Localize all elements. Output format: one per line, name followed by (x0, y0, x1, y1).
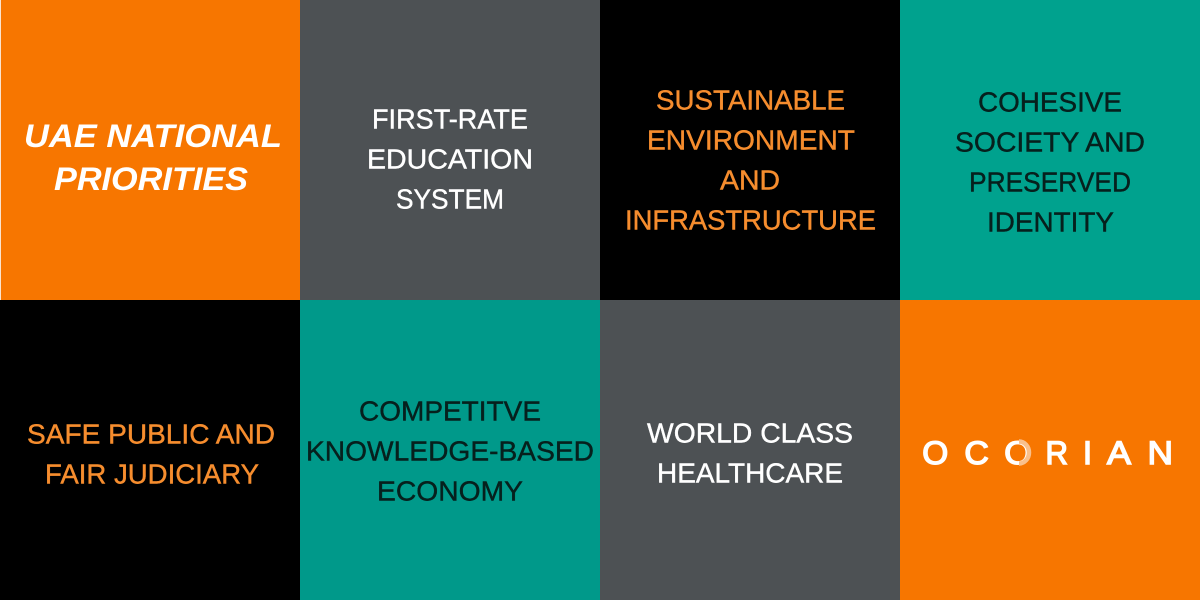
logo: Ocorian wordmark: A (1107, 435, 1132, 471)
panel text: WORLD CLASS (647, 417, 853, 448)
panel: logo (900, 300, 1200, 600)
panel text: HEALTHCARE (657, 457, 843, 488)
panel text: COHESIVE (978, 86, 1122, 117)
panel text: EDUCATION (367, 143, 533, 174)
panel text: INFRASTRUCTURE (625, 204, 876, 235)
panel text: SYSTEM (396, 183, 504, 214)
panel: safe public and fair judiciary (0, 300, 300, 600)
panel: title (1, 0, 300, 300)
panel: cohesive society and preserved identity (900, 0, 1200, 300)
logo: Ocorian wordmark: N (1148, 435, 1173, 471)
panel text: PRESERVED (969, 166, 1131, 197)
panel text: ECONOMY (377, 475, 523, 506)
panel text (367, 103, 533, 214)
panel text: FIRST-RATE (372, 103, 528, 134)
panel text: SOCIETY AND (955, 126, 1145, 157)
title text: UAE NATIONAL (24, 118, 282, 154)
logo: Ocorian wordmark: C (964, 435, 989, 471)
panel text: SAFE PUBLIC AND (27, 418, 275, 449)
logo: Ocorian wordmark: O (922, 435, 948, 471)
panel: world class healthcare (600, 300, 900, 600)
panel text (306, 395, 594, 506)
panel text (625, 84, 876, 235)
panel text (27, 418, 275, 489)
panel text: COMPETITVE (359, 395, 541, 426)
panel: sustainable environment and infrastructure (600, 0, 900, 300)
logo: Ocorian wordmark: O (1004, 435, 1031, 471)
logo: Ocorian wordmark: R (1046, 435, 1068, 471)
panel text (955, 86, 1145, 237)
logo: Ocorian wordmark (922, 435, 1173, 471)
title text (24, 118, 282, 197)
panel text (647, 417, 853, 488)
panel text: SUSTAINABLE (656, 84, 845, 115)
panel: competitive knowledge-based economy (300, 300, 600, 600)
panel text: IDENTITY (987, 206, 1114, 237)
panel text: FAIR JUDICIARY (45, 458, 259, 489)
logo: Ocorian wordmark: I (1083, 435, 1092, 471)
panel text: ENVIRONMENT (647, 124, 855, 155)
panel text: KNOWLEDGE-BASED (306, 435, 594, 466)
panel text: AND (720, 164, 780, 195)
title text: PRIORITIES (54, 161, 249, 197)
panel: first-rate education system (300, 0, 600, 300)
